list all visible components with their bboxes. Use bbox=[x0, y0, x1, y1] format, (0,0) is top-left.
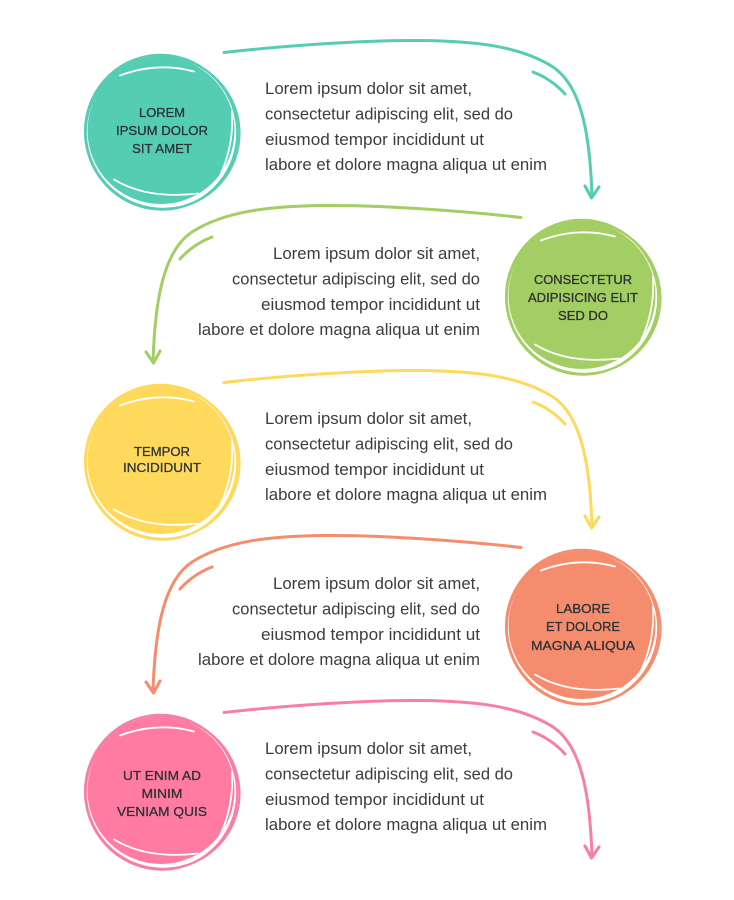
circle label: MAGNA ALIQUA bbox=[531, 638, 635, 653]
circle label: ET DOLORE bbox=[546, 619, 620, 634]
body text: consectetur adipiscing elit, sed do bbox=[265, 106, 513, 124]
circle label: TEMPOR bbox=[134, 444, 190, 459]
body text: labore et dolore magna aliqua ut enim bbox=[265, 156, 547, 174]
circle label: INCIDIDUNT bbox=[123, 460, 201, 475]
arrow: teal bbox=[224, 40, 599, 198]
body text: Lorem ipsum dolor sit amet, bbox=[273, 245, 480, 263]
body text: eiusmod tempor incididunt ut bbox=[265, 461, 484, 479]
step 2 panel bbox=[146, 200, 682, 396]
arrow: yellow bbox=[224, 370, 599, 528]
step 4 panel bbox=[146, 530, 682, 726]
body text: consectetur adipiscing elit, sed do bbox=[232, 600, 480, 618]
body text bbox=[265, 80, 547, 174]
arrow: orange bbox=[146, 535, 521, 693]
step 5 panel bbox=[64, 695, 599, 891]
body text: consectetur adipiscing elit, sed do bbox=[232, 270, 480, 288]
body text bbox=[198, 575, 480, 669]
body text: consectetur adipiscing elit, sed do bbox=[265, 436, 513, 454]
circle: green bbox=[485, 200, 682, 396]
body text: labore et dolore magna aliqua ut enim bbox=[265, 816, 547, 834]
circle: teal bbox=[64, 35, 261, 231]
circle label: LOREM bbox=[139, 105, 185, 120]
body text bbox=[265, 410, 547, 504]
arrow: green bbox=[146, 205, 521, 363]
body text: eiusmod tempor incididunt ut bbox=[265, 791, 484, 809]
body text: eiusmod tempor incididunt ut bbox=[265, 131, 484, 149]
body text: Lorem ipsum dolor sit amet, bbox=[265, 80, 472, 98]
body text: Lorem ipsum dolor sit amet, bbox=[265, 410, 472, 428]
body text bbox=[265, 740, 547, 834]
circle label: LABORE bbox=[556, 601, 610, 616]
body text: Lorem ipsum dolor sit amet, bbox=[265, 740, 472, 758]
circle: yellow bbox=[64, 365, 261, 561]
circle label bbox=[123, 444, 201, 475]
circle label: VENIAM QUIS bbox=[117, 804, 207, 819]
circle label: SIT AMET bbox=[132, 141, 192, 156]
circle: orange bbox=[485, 530, 682, 726]
body text: consectetur adipiscing elit, sed do bbox=[265, 766, 513, 784]
circle label: SED DO bbox=[558, 308, 608, 323]
circle label bbox=[531, 601, 635, 653]
circle label: MINIM bbox=[142, 786, 182, 801]
body text bbox=[198, 245, 480, 339]
circle label bbox=[116, 105, 208, 156]
circle label: ADIPISICING ELIT bbox=[528, 290, 638, 305]
circle label: UT ENIM AD bbox=[123, 768, 201, 783]
circle label: CONSECTETUR bbox=[534, 272, 632, 287]
step 1 panel bbox=[64, 35, 599, 231]
body text: Lorem ipsum dolor sit amet, bbox=[273, 575, 480, 593]
body text: labore et dolore magna aliqua ut enim bbox=[198, 321, 480, 339]
body text: eiusmod tempor incididunt ut bbox=[261, 296, 480, 314]
body text: labore et dolore magna aliqua ut enim bbox=[265, 486, 547, 504]
circle label: IPSUM DOLOR bbox=[116, 123, 208, 138]
body text: eiusmod tempor incididunt ut bbox=[261, 626, 480, 644]
circle label bbox=[117, 768, 207, 819]
body text: labore et dolore magna aliqua ut enim bbox=[198, 651, 480, 669]
circle label bbox=[528, 272, 638, 323]
step 3 panel bbox=[64, 365, 599, 561]
circle: pink bbox=[64, 695, 261, 891]
arrow: pink bbox=[224, 700, 599, 858]
